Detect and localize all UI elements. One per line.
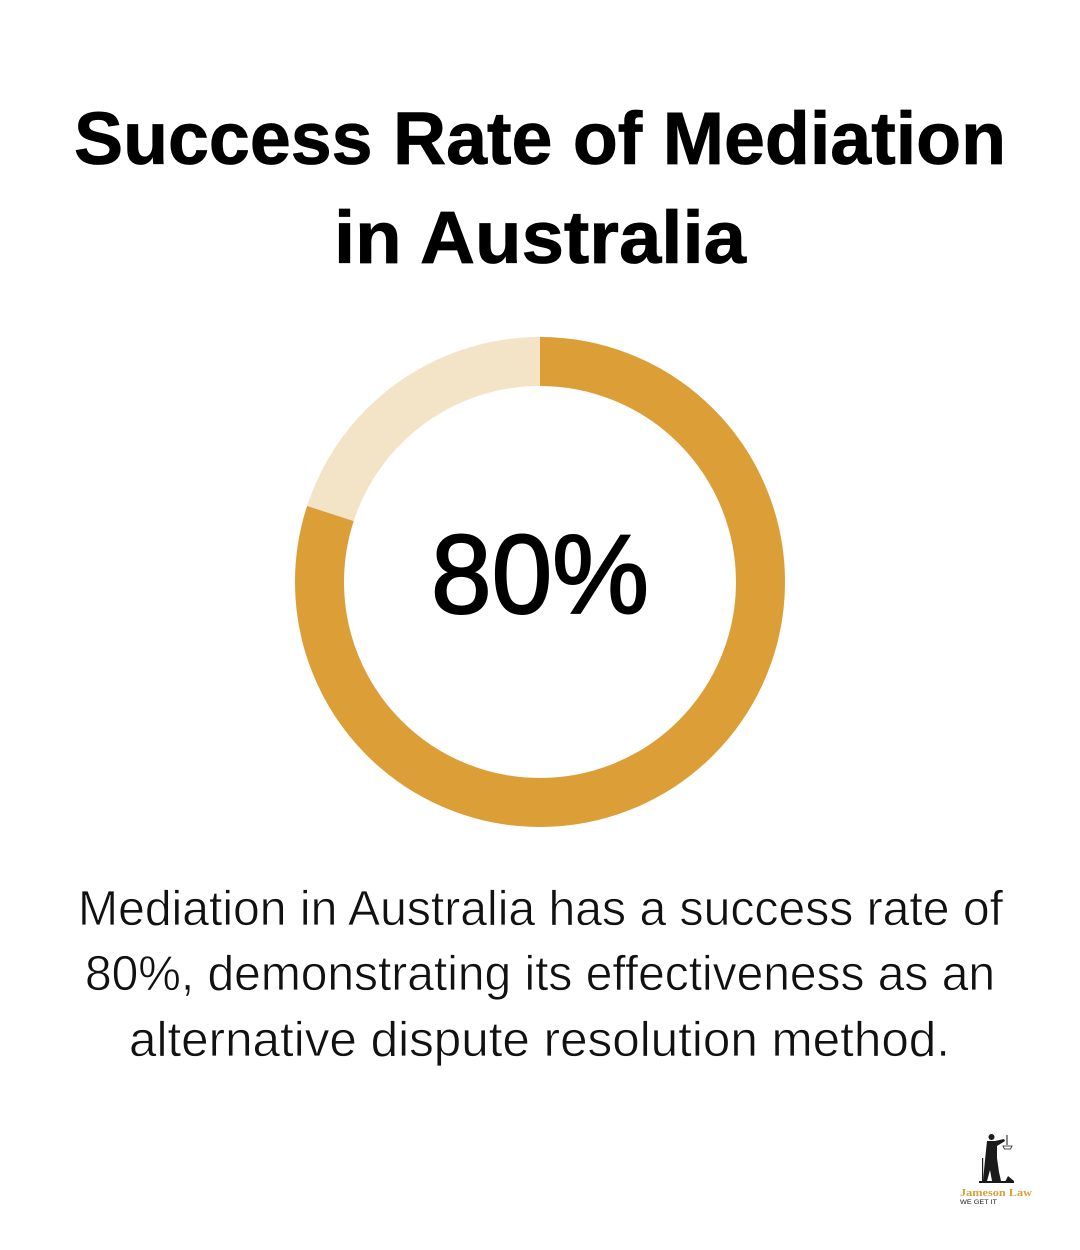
- title: Success Rate of Mediation: [74, 97, 1006, 180]
- description text: [78, 882, 1003, 1067]
- description text: 80%, demonstrating its effectiveness as an: [85, 947, 995, 1001]
- logo: Jameson Law: [960, 1134, 1033, 1206]
- title: [74, 97, 1006, 279]
- description text: Mediation in Australia has a success rate of: [78, 882, 1003, 936]
- description text: alternative dispute resolution method.: [129, 1013, 950, 1067]
- logo name: Jameson Law: [960, 1188, 1033, 1199]
- logo tagline: WE GET IT: [960, 1199, 997, 1206]
- icon: lady justice: [979, 1134, 1014, 1183]
- title: in Australia: [334, 196, 747, 279]
- donut value: 80%: [431, 512, 649, 637]
- donut chart: 80% success rate: [320, 362, 760, 802]
